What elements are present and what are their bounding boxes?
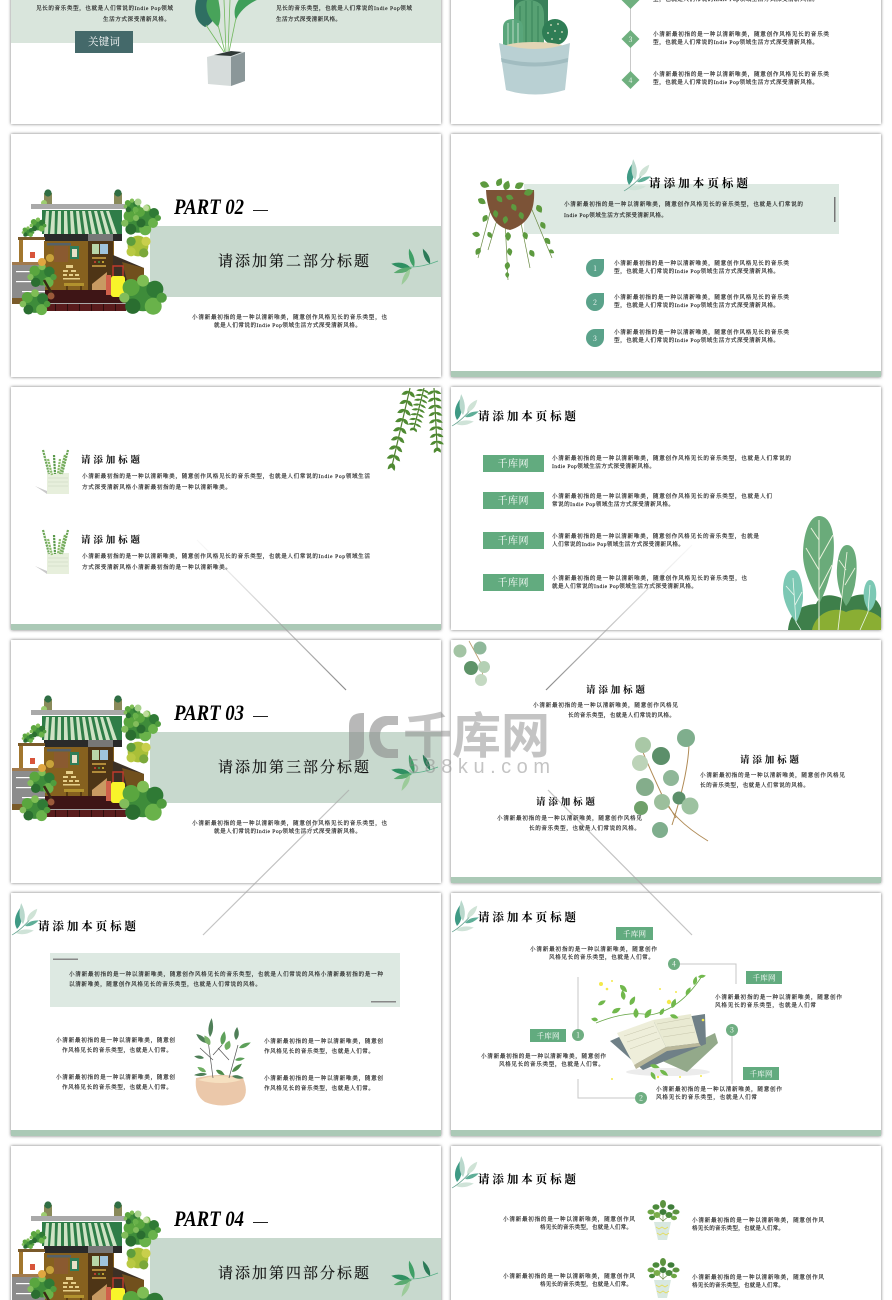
icon: leafy plants <box>783 516 881 630</box>
description: 就是人们常说的Indie Pop领域生活方式深受清新风格。 <box>214 321 361 329</box>
banner accent line <box>834 197 836 222</box>
item 2 text: 请添加标题 <box>81 534 140 546</box>
part label: PART 02 <box>173 194 244 219</box>
text left top <box>56 1036 175 1054</box>
numbered item 3: 型，也就是人们常说的Indie Pop领域生活方式深受清新风格。 <box>614 336 779 344</box>
heading: 请添加本页标题 <box>478 409 576 423</box>
banner text: 小清新最初指的是一种以清新唯美，随意创作风格见长的音乐类型，也就是人们常说的风格小清新最初指的是一种 <box>69 970 383 978</box>
node 2: 2 <box>639 1094 643 1104</box>
text blocks: 型，也就是人们常说的Indie Pop领域生活方式深受清新风格。 <box>653 38 818 46</box>
text row 1 left: 格见长的音乐类型，也就是人们常。 <box>540 1223 632 1231</box>
banner <box>524 184 839 234</box>
icon: eucalyptus top <box>454 641 490 686</box>
text row 1 right: 小清新最初指的是一种以清新唯美，随意创作风 <box>692 1216 824 1224</box>
section title: 请添加第三部分标题 <box>218 758 369 776</box>
top tag and text: 风格见长的音乐类型，也就是人们常。 <box>549 953 654 961</box>
band <box>150 732 441 803</box>
bottom bar <box>11 1130 441 1136</box>
band <box>150 1238 441 1300</box>
text blocks: 型，也就是人们常说的Indie Pop领域生活方式深受清新风格。 <box>653 78 818 86</box>
left text block <box>36 4 173 23</box>
text row 2 right: 格见长的音乐类型，也就是人们常。 <box>692 1281 784 1289</box>
node 4: 4 <box>672 960 676 970</box>
numbered item 1: 1 <box>593 264 597 274</box>
right text block: 生活方式深受清新风格。 <box>276 15 341 23</box>
bottom bar <box>11 624 441 630</box>
numbered item 2: 型，也就是人们常说的Indie Pop领域生活方式深受清新风格。 <box>614 301 779 309</box>
tag: 千库网 <box>536 1030 560 1042</box>
icon: sprig <box>452 394 480 426</box>
panel: part 04 <box>11 1146 441 1300</box>
icon: hanging vines <box>383 386 445 473</box>
text left bottom: 作风格见长的音乐类型，也就是人们常。 <box>62 1083 172 1091</box>
item 1 text: 小清新最初指的是一种以清新唯美，随意创作风格见长的音乐类型，也就是人们常说的Indie Pop领域生活 <box>82 472 370 480</box>
right text block: 见长的音乐类型，也就是人们常说的Indie Pop领域 <box>276 4 412 12</box>
row 4: 就是人们常说的Indie Pop领域生活方式深受清新风格。 <box>552 582 697 590</box>
section title: 请添加第二部分标题 <box>218 252 369 270</box>
node 3: 小清新最初指的是一种以清新唯美，随意创作 <box>656 1085 782 1093</box>
illustration: shop <box>12 189 167 315</box>
node 4: 风格见长的音乐类型，也就是人们常 <box>715 1001 816 1009</box>
panel: tag list <box>451 387 881 630</box>
right text block <box>276 4 412 23</box>
connector lines <box>578 964 736 1098</box>
panel: last slide <box>451 1146 881 1300</box>
node 3 <box>656 1024 782 1101</box>
text block right: 小清新最初指的是一种以清新唯美，随意创作风格见 <box>700 771 845 779</box>
marker 2 <box>622 0 640 9</box>
section title: 请添加第四部分标题 <box>218 1264 369 1282</box>
node 3: 风格见长的音乐类型，也就是人们常 <box>656 1093 757 1101</box>
top tag and text: 千库网 <box>623 928 646 940</box>
text row 2 left <box>503 1272 635 1288</box>
marker 4: 4 <box>629 76 633 86</box>
node 1: 小清新最初指的是一种以清新唯美，随意创作 <box>481 1052 606 1060</box>
icon: sprig <box>452 900 480 932</box>
text block top <box>533 684 678 719</box>
text right top: 作风格见长的音乐类型，也就是人们常。 <box>264 1047 374 1055</box>
text row 2 right: 小清新最初指的是一种以清新唯美，随意创作风 <box>692 1273 824 1281</box>
text block bottom <box>497 796 642 832</box>
heading: 请添加本页标题 <box>38 919 136 933</box>
keyword tag: 关键词 <box>88 34 120 49</box>
text block top: 请添加标题 <box>586 684 645 696</box>
item 1 text: 请添加标题 <box>81 454 140 466</box>
item 2 text <box>81 534 370 571</box>
numbered item 2: 2 <box>593 298 597 308</box>
icon: sprig <box>624 159 652 191</box>
panel: slide 1 keyword <box>11 0 441 124</box>
text right bottom: 作风格见长的音乐类型，也就是人们常。 <box>264 1084 374 1092</box>
heading: 请添加本页标题 <box>649 176 748 190</box>
node 1 <box>481 1029 606 1068</box>
description <box>192 819 387 835</box>
text left bottom <box>56 1073 175 1091</box>
item 1 text <box>81 454 370 491</box>
illustration: shop <box>12 695 167 821</box>
left text block: 生活方式深受清新风格。 <box>103 15 170 23</box>
text right bottom <box>264 1074 383 1092</box>
panel: part 03 <box>11 640 441 883</box>
description: 小清新最初指的是一种以清新唯美，随意创作风格见长的音乐类型，也 <box>192 819 387 827</box>
node 1: 风格见长的音乐类型，也就是人们常。 <box>499 1060 604 1068</box>
text row 1 left: 小清新最初指的是一种以清新唯美，随意创作风 <box>503 1215 635 1223</box>
row 4 <box>483 574 747 591</box>
text right bottom: 小清新最初指的是一种以清新唯美，随意创 <box>264 1074 383 1082</box>
row 1 <box>483 454 791 472</box>
part label: PART 03 <box>173 700 244 725</box>
text left top: 作风格见长的音乐类型，也就是人们常。 <box>62 1046 172 1054</box>
node 4 <box>668 958 842 1009</box>
watermark text: 千库网 <box>403 710 550 764</box>
icon: leaf <box>391 1260 438 1298</box>
watermark text: 588ku.com <box>408 756 550 778</box>
item 2 text: 方式深受清新风格小清新最初指的是一种以清新唯美。 <box>82 563 231 571</box>
row 3: 千库网 <box>498 532 528 547</box>
marker 3: 3 <box>629 35 633 45</box>
row 4: 小清新最初指的是一种以清新唯美，随意创作风格见长的音乐类型，也 <box>552 574 747 582</box>
numbered item 3: 3 <box>593 334 597 344</box>
top tag and text <box>530 927 657 961</box>
item 1 text: 方式深受清新风格小清新最初指的是一种以清新唯美。 <box>82 483 231 491</box>
illustration: shop <box>12 1201 167 1300</box>
text row 2 right <box>692 1273 824 1289</box>
row 1: 千库网 <box>498 455 528 470</box>
text block top: 长的音乐类型，也就是人们常说的风格。 <box>568 711 675 719</box>
text block right: 请添加标题 <box>740 754 799 766</box>
bottom bar <box>451 1130 881 1136</box>
timeline <box>622 0 640 89</box>
panel: part 02 <box>11 134 441 377</box>
watermark logo <box>349 713 398 760</box>
banner text: 小清新最初指的是一种以清新唯美，随意创作风格见长的音乐类型，也就是人们常说的 <box>564 200 803 208</box>
tag: 千库网 <box>752 972 776 984</box>
row 2: 小清新最初指的是一种以清新唯美，随意创作风格见长的音乐类型，也就是人们 <box>552 492 772 500</box>
text row 1 right: 格见长的音乐类型，也就是人们常。 <box>692 1224 784 1232</box>
bottom bar <box>451 877 881 883</box>
numbered item 1: 型，也就是人们常说的Indie Pop领域生活方式深受清新风格。 <box>614 267 779 275</box>
icon: small pot 2 <box>648 1258 680 1298</box>
banner text: 以清新唯美，随意创作风格见长的音乐类型，也就是人们常说的风格。 <box>69 980 261 988</box>
text blocks <box>653 0 829 86</box>
description <box>192 313 387 329</box>
text blocks: 小清新最初指的是一种以清新唯美，随意创作风格见长的音乐类 <box>653 70 829 78</box>
text blocks: 小清新最初指的是一种以清新唯美，随意创作风格见长的音乐类 <box>653 30 829 38</box>
icon: leaf <box>391 248 438 286</box>
numbered item 2: 小清新最初指的是一种以清新唯美，随意创作风格见长的音乐类 <box>614 293 789 301</box>
description: 就是人们常说的Indie Pop领域生活方式深受清新风格。 <box>214 827 361 835</box>
bottom bar <box>451 371 881 377</box>
row 2: 千库网 <box>498 492 528 507</box>
text right top <box>264 1037 383 1055</box>
banner text <box>564 200 803 219</box>
text row 1 left <box>503 1215 635 1231</box>
row 2 <box>483 492 772 509</box>
item 2 text: 小清新最初指的是一种以清新唯美，随意创作风格见长的音乐类型，也就是人们常说的Indie Pop领域生活 <box>82 552 370 560</box>
node 1: 1 <box>576 1030 580 1040</box>
tag: 千库网 <box>750 1068 773 1080</box>
row 3: 人们常说的Indie Pop领域生活方式深受清新风格。 <box>552 540 684 548</box>
text block right: 长的音乐类型，也就是人们常说的风格。 <box>700 781 809 789</box>
panel: eucalyptus three text <box>451 640 881 883</box>
icon: sprig <box>452 1156 480 1188</box>
row 3 <box>483 532 759 549</box>
tag <box>746 971 782 984</box>
row 1: 小清新最初指的是一种以清新唯美，随意创作风格见长的音乐类型，也就是人们常说的 <box>552 454 791 462</box>
panel: two items with pots <box>11 386 445 630</box>
green band <box>11 0 441 43</box>
node 3: 3 <box>730 1026 734 1036</box>
banner text <box>69 970 383 988</box>
text block bottom: 长的音乐类型，也就是人们常说的风格。 <box>529 824 640 832</box>
row 3: 小清新最初指的是一种以清新唯美，随意创作风格见长的音乐类型，也就是 <box>552 532 759 540</box>
icon: pot 1 <box>35 450 69 494</box>
icon: small pot 1 <box>648 1200 680 1240</box>
description: 小清新最初指的是一种以清新唯美，随意创作风格见长的音乐类型，也 <box>192 313 387 321</box>
node 4: 小清新最初指的是一种以清新唯美，随意创作 <box>715 993 842 1001</box>
icon: cactus pot <box>499 0 570 94</box>
row 4: 千库网 <box>498 574 528 589</box>
numbered item 1: 小清新最初指的是一种以清新唯美，随意创作风格见长的音乐类 <box>614 259 789 267</box>
text row 2 left: 小清新最初指的是一种以清新唯美，随意创作风 <box>503 1272 635 1280</box>
panel: banner and four text <box>11 893 441 1136</box>
text row 2 left: 格见长的音乐类型，也就是人们常。 <box>540 1280 632 1288</box>
banner <box>50 953 400 1007</box>
icon: eucalyptus branch <box>632 729 708 841</box>
text block top: 小清新最初指的是一种以清新唯美，随意创作风格见 <box>533 701 678 709</box>
watermark diagonal lines <box>197 540 692 935</box>
text row 1 right <box>692 1216 824 1232</box>
icon: potted plant <box>195 0 262 86</box>
left text block: 见长的音乐类型，也就是人们常说的Indie Pop领域 <box>36 4 173 12</box>
banner text: Indie Pop领域生活方式深受清新风格。 <box>564 211 667 219</box>
icon: leaf <box>391 754 438 792</box>
text block bottom: 请添加标题 <box>536 796 595 808</box>
icon: leafy pot <box>194 1018 252 1106</box>
node 2 <box>635 1092 647 1104</box>
icon: sprig <box>12 903 40 935</box>
illustration: open book <box>591 974 718 1081</box>
keyword tag <box>75 31 133 53</box>
banner accents <box>53 958 396 1002</box>
panel: hanging plant list <box>451 134 881 377</box>
icon: hanging plant <box>472 177 555 280</box>
icon: pot 2 <box>35 530 69 574</box>
part label: PART 04 <box>173 1206 244 1231</box>
numbered item 3 <box>586 328 789 347</box>
numbered item 2 <box>586 293 789 311</box>
text block right <box>700 754 845 789</box>
panel: book diagram <box>451 893 881 1136</box>
panel: slide 2 timeline <box>451 0 881 124</box>
text right top: 小清新最初指的是一种以清新唯美，随意创 <box>264 1037 383 1045</box>
heading: 请添加本页标题 <box>478 1172 576 1186</box>
row 1: Indie Pop领域生活方式深受清新风格。 <box>552 462 655 470</box>
text left top: 小清新最初指的是一种以清新唯美，随意创 <box>56 1036 175 1044</box>
heading: 请添加本页标题 <box>478 910 576 924</box>
watermark <box>197 540 692 935</box>
text left bottom: 小清新最初指的是一种以清新唯美，随意创 <box>56 1073 175 1081</box>
numbered item 3: 小清新最初指的是一种以清新唯美，随意创作风格见长的音乐类 <box>614 328 789 336</box>
band <box>150 226 441 297</box>
numbered item 1 <box>586 259 789 277</box>
row 2: 常说的Indie Pop领域生活方式深受清新风格。 <box>552 500 674 508</box>
top tag and text: 小清新最初指的是一种以清新唯美，随意创作 <box>530 945 657 953</box>
text block bottom: 小清新最初指的是一种以清新唯美，随意创作风格见 <box>497 814 642 822</box>
